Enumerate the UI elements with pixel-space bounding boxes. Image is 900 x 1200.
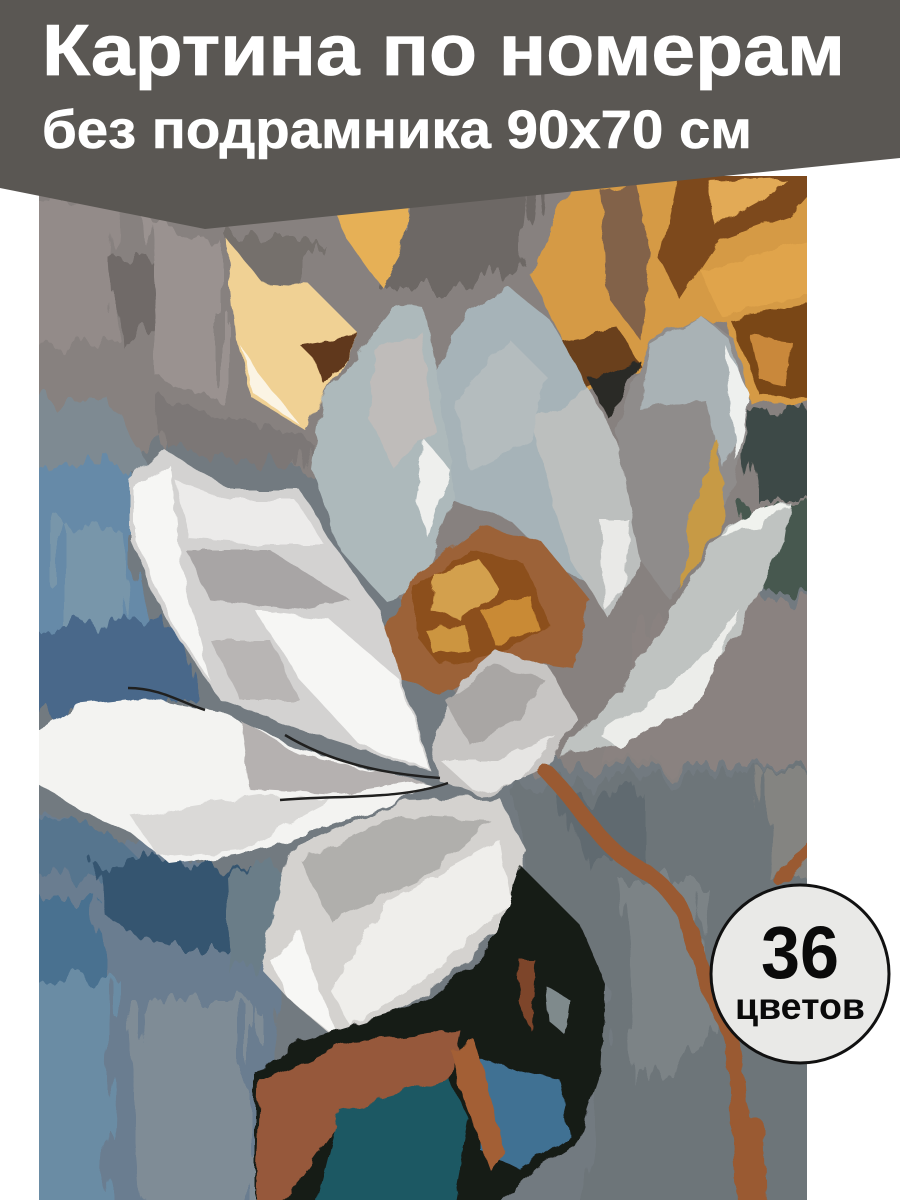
yellow leaf left — [226, 238, 360, 430]
lower petal — [262, 798, 526, 1042]
yellow leaf top — [332, 203, 410, 285]
flower centre stamens — [380, 525, 590, 695]
title: Картина по номерам — [42, 11, 845, 91]
centre bud petal — [430, 650, 578, 796]
badge number: 36 — [761, 911, 839, 994]
header banner — [0, 0, 900, 229]
lower left petal — [20, 698, 432, 864]
brown stem — [545, 770, 815, 1200]
dark leaf bottom — [255, 865, 606, 1200]
canvas underlay — [39, 176, 807, 1200]
dark petal lines — [128, 688, 448, 800]
orange leaf top right — [530, 176, 807, 418]
painting background — [39, 192, 807, 1200]
painting: white magnolia — [39, 176, 807, 1200]
right petal — [558, 440, 788, 755]
upper petals — [312, 288, 750, 620]
badge: 36 colours — [711, 885, 889, 1063]
banner shape — [0, 0, 900, 229]
subtitle: без подрамника 90х70 см — [42, 100, 752, 160]
badge label: цветов — [735, 986, 865, 1027]
left white petal — [130, 450, 432, 772]
badge circle — [711, 885, 889, 1063]
